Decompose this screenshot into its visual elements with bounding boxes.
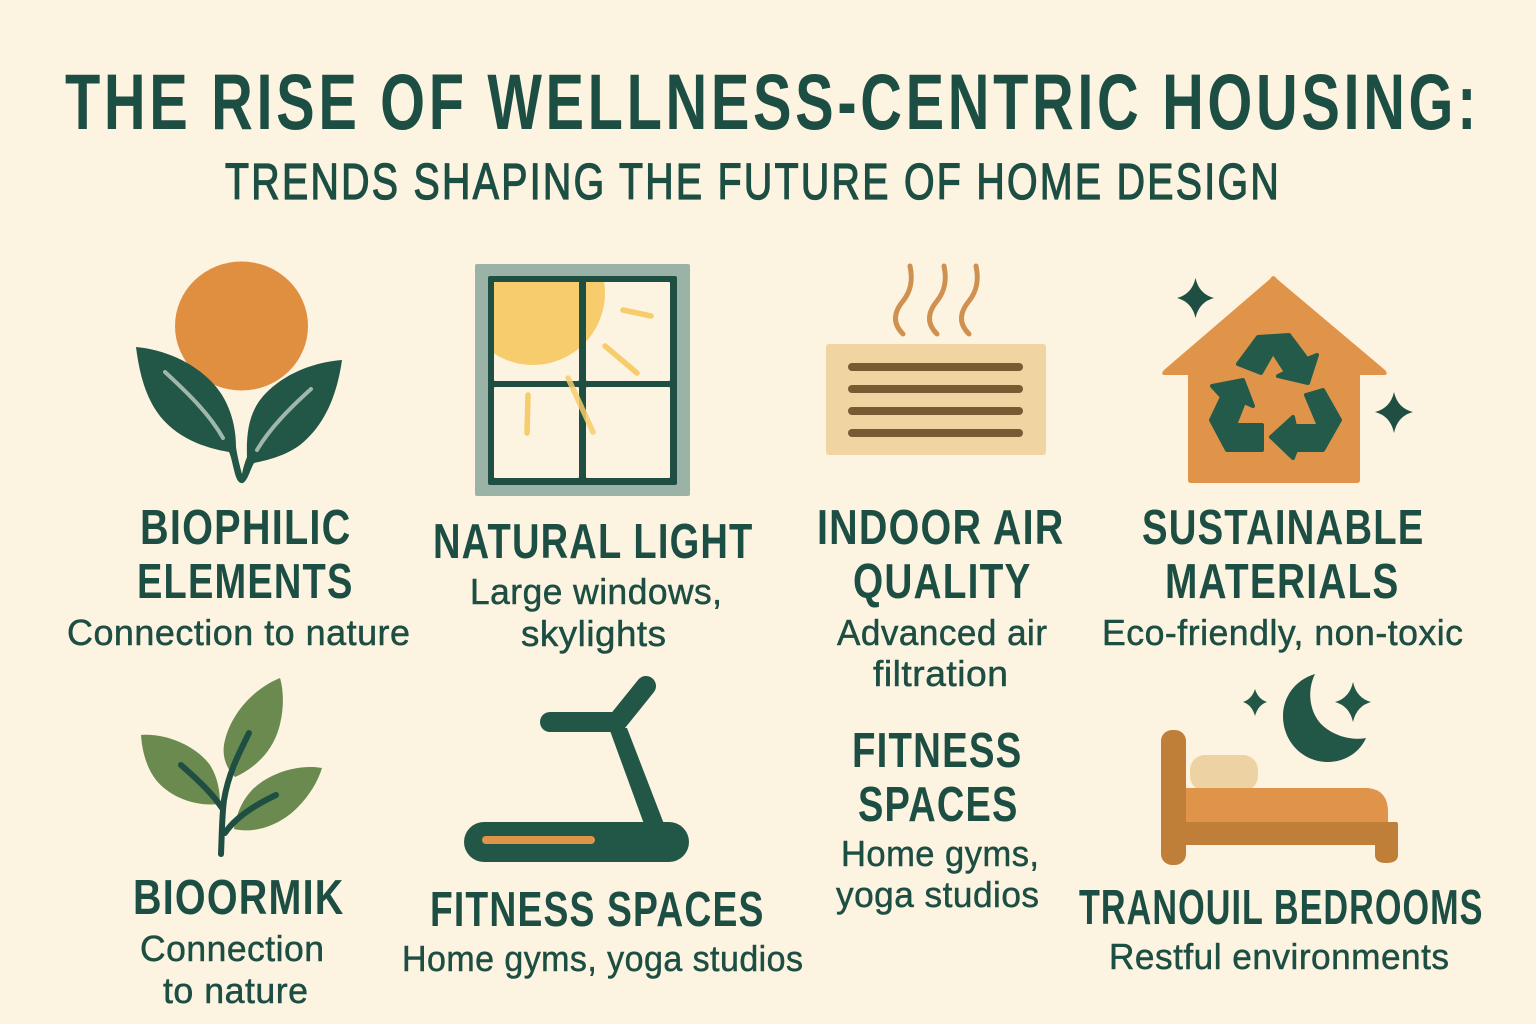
text: advanced air filtration	[837, 612, 1048, 694]
panel: bioormik	[133, 678, 344, 1011]
heading: sustainable materials: MATERIALS	[1165, 555, 1400, 609]
heading: bioormik: BIOORMIK	[133, 871, 344, 925]
text: connection to nature: Connection	[140, 928, 324, 969]
heading: fitness spaces: FITNESS SPACES	[430, 883, 764, 937]
heading: fitness spaces: FITNESS	[852, 724, 1022, 778]
heading: natural light: NATURAL LIGHT	[433, 515, 754, 569]
heading: indoor air quality: QUALITY	[853, 555, 1032, 609]
panel: fitness spaces with treadmill	[402, 686, 804, 979]
text: restful environments: Restful environments	[1109, 936, 1450, 977]
icon: treadmill	[464, 686, 689, 862]
text: home gyms, yoga studios: Home gyms,	[841, 833, 1040, 874]
text: home gyms, yoga studios	[836, 833, 1040, 915]
heading: biophilic elements	[137, 501, 354, 609]
icon: air vent with rising waves	[826, 266, 1046, 455]
text: advanced air filtration: filtration	[873, 653, 1008, 694]
text: connection to nature: to nature	[163, 970, 308, 1011]
panel: biophilic elements	[67, 262, 410, 653]
icon: window with sun	[475, 264, 690, 496]
icon: green sprig	[141, 678, 322, 854]
text: large windows, skylights: Large windows,	[470, 571, 722, 612]
heading: biophilic elements: ELEMENTS	[137, 555, 354, 609]
text: connection to nature	[140, 928, 324, 1011]
heading: indoor air quality: INDOOR AIR	[817, 501, 1064, 555]
text: home gyms, yoga studios: Home gyms, yoga studios	[402, 938, 804, 979]
panel: indoor air quality	[817, 266, 1064, 694]
panel: tranquil bedrooms	[1079, 674, 1484, 977]
heading: indoor air quality	[817, 501, 1064, 609]
icon: house with recycling arrows and sparkles	[1162, 276, 1413, 483]
panel: natural light	[433, 221, 754, 654]
text: large windows, skylights: skylights	[521, 613, 666, 654]
heading: fitness spaces: SPACES	[858, 778, 1018, 832]
text: large windows, skylights	[470, 571, 722, 654]
heading: sustainable materials	[1142, 501, 1424, 609]
icon: bed with moon and stars	[1161, 674, 1398, 865]
text: advanced air filtration: Advanced air	[837, 612, 1048, 653]
text: home gyms, yoga studios: yoga studios	[836, 874, 1040, 915]
text: connection to nature: Connection to nature	[67, 612, 410, 653]
text: eco-friendly, non-toxic: Eco-friendly, non-toxic	[1102, 612, 1464, 653]
icon: sun and two leaves	[136, 262, 342, 483]
heading: fitness spaces	[852, 724, 1022, 832]
heading: biophilic elements: BIOPHILIC	[140, 501, 352, 555]
panel: fitness spaces text only	[836, 724, 1040, 915]
panel: sustainable materials	[1102, 276, 1464, 653]
heading: sustainable materials: SUSTAINABLE	[1142, 501, 1424, 555]
